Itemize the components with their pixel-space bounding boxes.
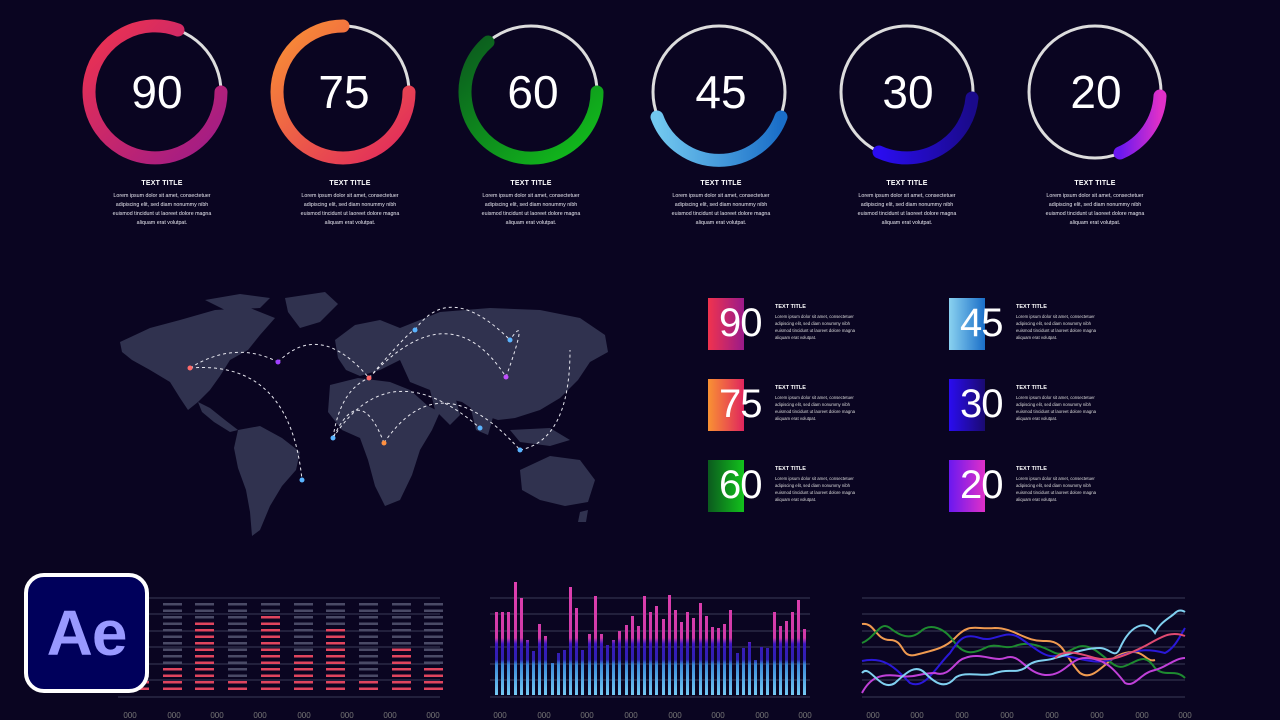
ring 90 [89, 26, 221, 158]
chart: stacked bar chart: 000 [624, 711, 638, 720]
caption 6 [1046, 180, 1144, 226]
ring 60 [465, 26, 597, 158]
chart: line chart: 000 [910, 711, 924, 720]
Europe [335, 320, 410, 376]
chart: segmented bars: 000 [297, 711, 311, 720]
caption 4: TEXT TITLE [700, 180, 742, 187]
ring 45 [653, 26, 785, 160]
card 20: Lorem ipsum dolor sit amet, consectetuer adipiscing elit, sed diam nonummy nibh euismod tincidunt ut laoreet dolore magna aliquam erat volutpat. [1016, 476, 1096, 502]
icon: Adobe After Effects logo [24, 573, 149, 693]
card 30: Lorem ipsum dolor sit amet, consectetuer adipiscing elit, sed diam nonummy nibh euismod tincidunt ut laoreet dolore magna aliquam erat volutpat. [1016, 395, 1096, 421]
Asia [400, 308, 608, 420]
ring 45: 45 [695, 66, 747, 118]
caption 1: aliquam erat volutpat. [137, 220, 187, 226]
world map [120, 292, 608, 536]
ring 30: 30 [882, 66, 934, 118]
caption 5 [858, 180, 956, 226]
caption 3: aliquam erat volutpat. [506, 220, 556, 226]
chart: line chart: 000 [1000, 711, 1014, 720]
caption 3: Lorem ipsum dolor sit amet, consectetuer [482, 193, 580, 199]
Central America [198, 402, 238, 432]
caption 1: TEXT TITLE [141, 180, 183, 187]
chart: segmented bars: 000 [123, 711, 137, 720]
chart: segmented bars: 000 [210, 711, 224, 720]
card 75 [708, 379, 855, 431]
ring 20 [1029, 26, 1161, 158]
caption 3 [482, 180, 580, 226]
caption 4: adipiscing elit, sed diam nonummy nibh [675, 202, 767, 208]
caption 5: Lorem ipsum dolor sit amet, consectetuer [858, 193, 956, 199]
chart: stacked bar chart: 000 [798, 711, 812, 720]
caption 1: adipiscing elit, sed diam nonummy nibh [116, 202, 208, 208]
ring 30 [841, 26, 973, 158]
caption 4 [672, 180, 770, 226]
ring 75 [277, 26, 409, 158]
ring 60: 60 [507, 66, 559, 118]
card 20: TEXT TITLE [1016, 466, 1047, 472]
card 20: 20 [960, 463, 1002, 507]
chart: stacked bar chart [490, 582, 812, 720]
card 75: 75 [719, 382, 762, 426]
SE Asia islands [510, 428, 570, 446]
caption 6: TEXT TITLE [1074, 180, 1116, 187]
caption 6: euismod tincidunt ut laoreet dolore magna [1046, 211, 1144, 217]
caption 3: euismod tincidunt ut laoreet dolore magna [482, 211, 580, 217]
caption 2: adipiscing elit, sed diam nonummy nibh [304, 202, 396, 208]
card 45 [949, 298, 1096, 350]
Australia [520, 456, 595, 506]
card 30: TEXT TITLE [1016, 385, 1047, 391]
South America [234, 426, 300, 536]
Greenland [285, 292, 338, 328]
ring 20: 20 [1070, 66, 1122, 118]
card 75: TEXT TITLE [775, 385, 806, 391]
card 90 [708, 298, 855, 350]
Arabia/India [430, 390, 495, 435]
chart: segmented bars: 000 [340, 711, 354, 720]
caption 4: aliquam erat volutpat. [696, 220, 746, 226]
icon: Adobe After Effects logo: Ae [47, 597, 126, 669]
chart: stacked bar chart: 000 [493, 711, 507, 720]
card 60: Lorem ipsum dolor sit amet, consectetuer adipiscing elit, sed diam nonummy nibh euismod tincidunt ut laoreet dolore magna aliquam erat volutpat. [775, 476, 855, 502]
chart: line chart: 000 [955, 711, 969, 720]
chart: segmented bars: 000 [253, 711, 267, 720]
card 90: Lorem ipsum dolor sit amet, consectetuer adipiscing elit, sed diam nonummy nibh euismod tincidunt ut laoreet dolore magna aliquam erat volutpat. [775, 314, 855, 340]
chart: line chart: 000 [1135, 711, 1149, 720]
card 90: TEXT TITLE [775, 304, 806, 310]
card 75: Lorem ipsum dolor sit amet, consectetuer adipiscing elit, sed diam nonummy nibh euismod tincidunt ut laoreet dolore magna aliquam erat volutpat. [775, 395, 855, 421]
card 30 [949, 379, 1096, 431]
chart: stacked bar chart: 000 [668, 711, 682, 720]
card 30: 30 [960, 382, 1002, 426]
chart: stacked bar chart: 000 [755, 711, 769, 720]
caption 1: Lorem ipsum dolor sit amet, consectetuer [113, 193, 211, 199]
caption 2 [300, 180, 400, 226]
caption 5: euismod tincidunt ut laoreet dolore magna [858, 211, 956, 217]
caption 6: adipiscing elit, sed diam nonummy nibh [1049, 202, 1141, 208]
chart: line chart [861, 598, 1192, 720]
card 20 [949, 460, 1096, 512]
chart: segmented bars: 000 [167, 711, 181, 720]
caption 5: TEXT TITLE [886, 180, 928, 187]
caption 3: TEXT TITLE [510, 180, 552, 187]
North America [120, 308, 275, 410]
chart: segmented bars [118, 598, 443, 720]
caption 2: aliquam erat volutpat. [325, 220, 375, 226]
rings row [82, 19, 1166, 167]
card 60 [708, 460, 855, 512]
card 45: 45 [960, 301, 1002, 345]
card 60: TEXT TITLE [775, 466, 806, 472]
ring 75: 75 [318, 66, 370, 118]
ring 90: 90 [131, 66, 183, 118]
card 90: 90 [719, 301, 762, 345]
card 45: TEXT TITLE [1016, 304, 1047, 310]
caption 2: euismod tincidunt ut laoreet dolore magna [301, 211, 399, 217]
Africa [328, 378, 440, 506]
chart: stacked bar chart: 000 [711, 711, 725, 720]
card 45: Lorem ipsum dolor sit amet, consectetuer adipiscing elit, sed diam nonummy nibh euismod tincidunt ut laoreet dolore magna aliquam erat volutpat. [1016, 314, 1096, 340]
chart: line chart: 000 [1178, 711, 1192, 720]
chart: stacked bar chart: 000 [580, 711, 594, 720]
caption 4: euismod tincidunt ut laoreet dolore magna [672, 211, 770, 217]
caption 2: TEXT TITLE [329, 180, 371, 187]
chart: stacked bar chart: 000 [537, 711, 551, 720]
card 60: 60 [719, 463, 762, 507]
caption 6: aliquam erat volutpat. [1070, 220, 1120, 226]
caption 2: Lorem ipsum dolor sit amet, consectetuer [301, 193, 399, 199]
chart: segmented bars: 000 [426, 711, 440, 720]
chart: line chart: 000 [1090, 711, 1104, 720]
caption 3: adipiscing elit, sed diam nonummy nibh [485, 202, 577, 208]
chart: segmented bars: 000 [383, 711, 397, 720]
chart: line chart: 000 [1045, 711, 1059, 720]
caption 4: Lorem ipsum dolor sit amet, consectetuer [672, 193, 770, 199]
caption 1 [112, 180, 212, 226]
chart: line chart: 000 [866, 711, 880, 720]
caption 5: aliquam erat volutpat. [882, 220, 932, 226]
caption 1: euismod tincidunt ut laoreet dolore magna [113, 211, 211, 217]
caption 5: adipiscing elit, sed diam nonummy nibh [861, 202, 953, 208]
caption 6: Lorem ipsum dolor sit amet, consectetuer [1046, 193, 1144, 199]
